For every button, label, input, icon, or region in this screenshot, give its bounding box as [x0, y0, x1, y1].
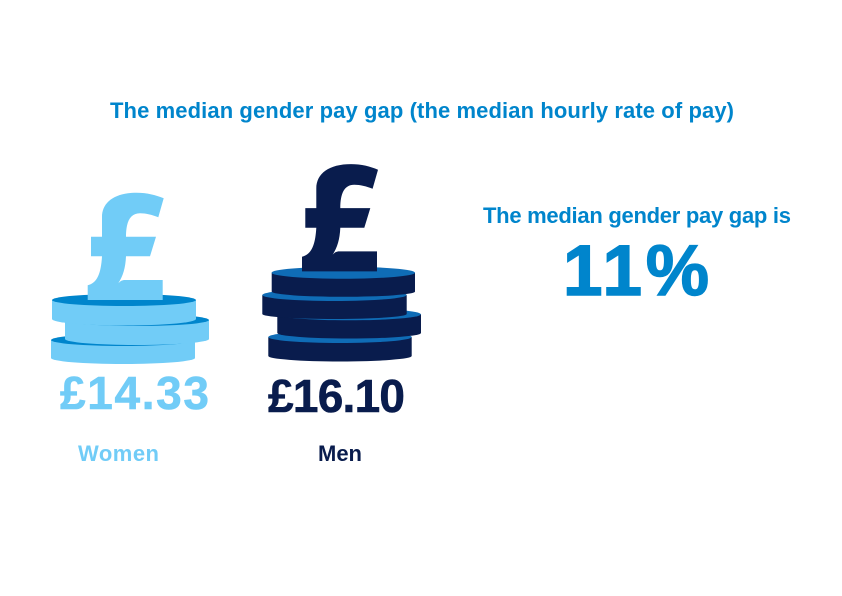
title: The median gender pay gap (the median hourly rate of pay) — [110, 98, 734, 123]
women amount: £14.33 — [60, 367, 209, 419]
callout figure: 11% — [563, 232, 709, 311]
icon: men coin stack — [262, 267, 421, 362]
men amount: £16.10 — [268, 370, 405, 422]
icon: women pound sign — [88, 193, 164, 300]
callout heading: The median gender pay gap is — [483, 203, 791, 228]
panel: men — [262, 164, 421, 466]
icon: women coin stack — [51, 294, 209, 364]
panel: women — [51, 193, 209, 466]
callout: pay gap — [483, 203, 791, 311]
icon: men pound sign — [302, 164, 378, 271]
women label: Women — [78, 441, 159, 466]
men label: Men — [318, 441, 362, 466]
